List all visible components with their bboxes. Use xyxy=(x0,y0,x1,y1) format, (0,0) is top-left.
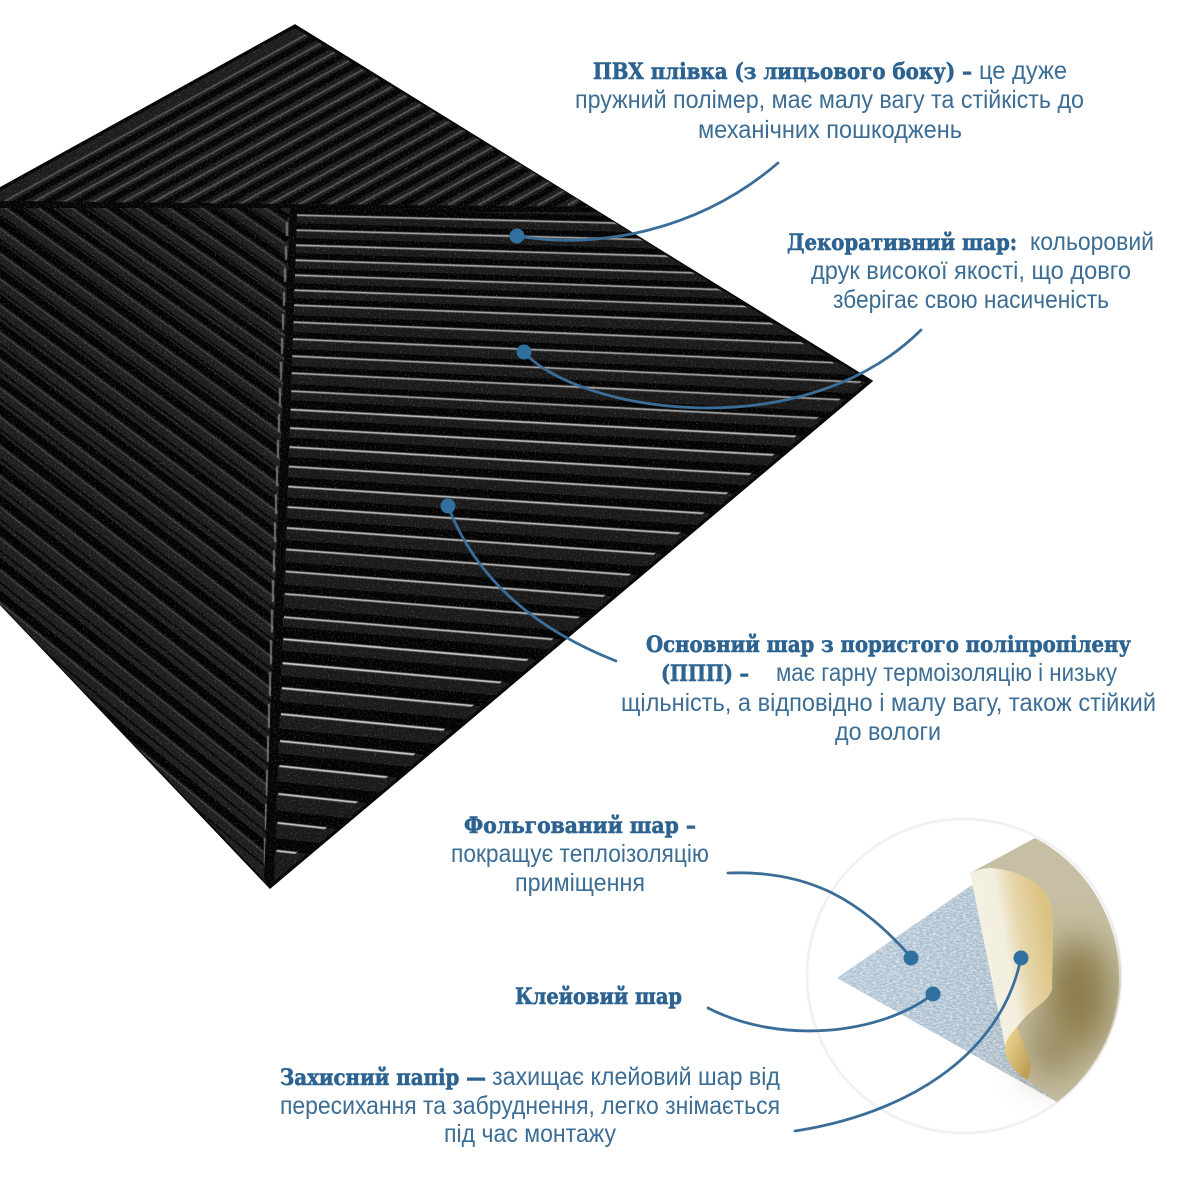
foil layer xyxy=(837,885,1057,1102)
dot xyxy=(926,986,940,1002)
label: Клейовий шар xyxy=(515,984,682,1010)
callout: base layer xyxy=(440,498,1156,746)
panel: backing detail circle xyxy=(807,819,1121,1133)
text block: під час монтажу xyxy=(444,1120,616,1148)
panel: black chevron wall panel xyxy=(0,24,874,889)
text block: Основний шар з пористого поліпропілену xyxy=(646,632,1132,658)
text block: ПВХ плівка (з лицьового боку) – xyxy=(593,59,972,85)
text block: пересихання та забруднення, легко знімається xyxy=(280,1092,780,1120)
dot xyxy=(440,498,456,514)
callout: PVC film xyxy=(510,57,1084,244)
text block: друк високої якості, що довго xyxy=(811,257,1131,285)
peeled paper flap xyxy=(970,868,1053,1047)
text block: Фольгований шар – xyxy=(464,813,696,839)
flap curl xyxy=(1005,1027,1031,1080)
callout: decorative layer xyxy=(516,228,1154,408)
leader line xyxy=(795,958,1021,1131)
protective paper xyxy=(970,838,1119,1102)
text block: покращує теплоізоляцію xyxy=(451,840,709,868)
panel base shape xyxy=(0,25,872,888)
speckle texture xyxy=(0,20,880,895)
text block: кольоровий xyxy=(1030,228,1154,256)
dot xyxy=(510,228,524,244)
text block: до вологи xyxy=(835,718,941,746)
text block: пружний полімер, має малу вагу та стійкість до xyxy=(575,86,1084,114)
text block: механічних пошкоджень xyxy=(698,116,962,144)
text block: приміщення xyxy=(515,869,645,897)
text block xyxy=(787,228,1154,314)
leader line xyxy=(524,330,921,408)
text block: щільність, а відповідно і малу вагу, також стійкий xyxy=(621,689,1156,717)
text block: Захисний папір — xyxy=(280,1065,486,1091)
text block: (ППП) – xyxy=(661,661,749,687)
leader line xyxy=(517,163,778,240)
callout: protective paper xyxy=(280,950,1028,1148)
leader line xyxy=(448,506,616,661)
text block: Декоративний шар: xyxy=(787,230,1017,256)
text block: зберігає свою насиченість xyxy=(833,286,1109,314)
leader line xyxy=(728,873,911,957)
left sector ridges xyxy=(0,208,290,880)
circle outline xyxy=(807,819,1121,1133)
text block xyxy=(451,813,709,897)
dot xyxy=(904,950,918,966)
dot xyxy=(1014,950,1028,966)
text block: це дуже xyxy=(979,57,1067,85)
leader line xyxy=(708,994,933,1031)
top sector ridges xyxy=(0,28,590,207)
text block xyxy=(280,1063,780,1148)
text block: має гарну термоізоляцію і низьку xyxy=(776,659,1117,687)
callout: foil layer xyxy=(451,813,918,966)
dot xyxy=(516,344,532,360)
text block xyxy=(621,632,1156,746)
right sector ridges xyxy=(272,212,866,884)
callout: adhesive layer xyxy=(515,984,940,1031)
seam highlight dashes xyxy=(265,222,287,866)
text block xyxy=(575,57,1084,144)
text block: захищає клейовий шар від xyxy=(492,1063,780,1091)
